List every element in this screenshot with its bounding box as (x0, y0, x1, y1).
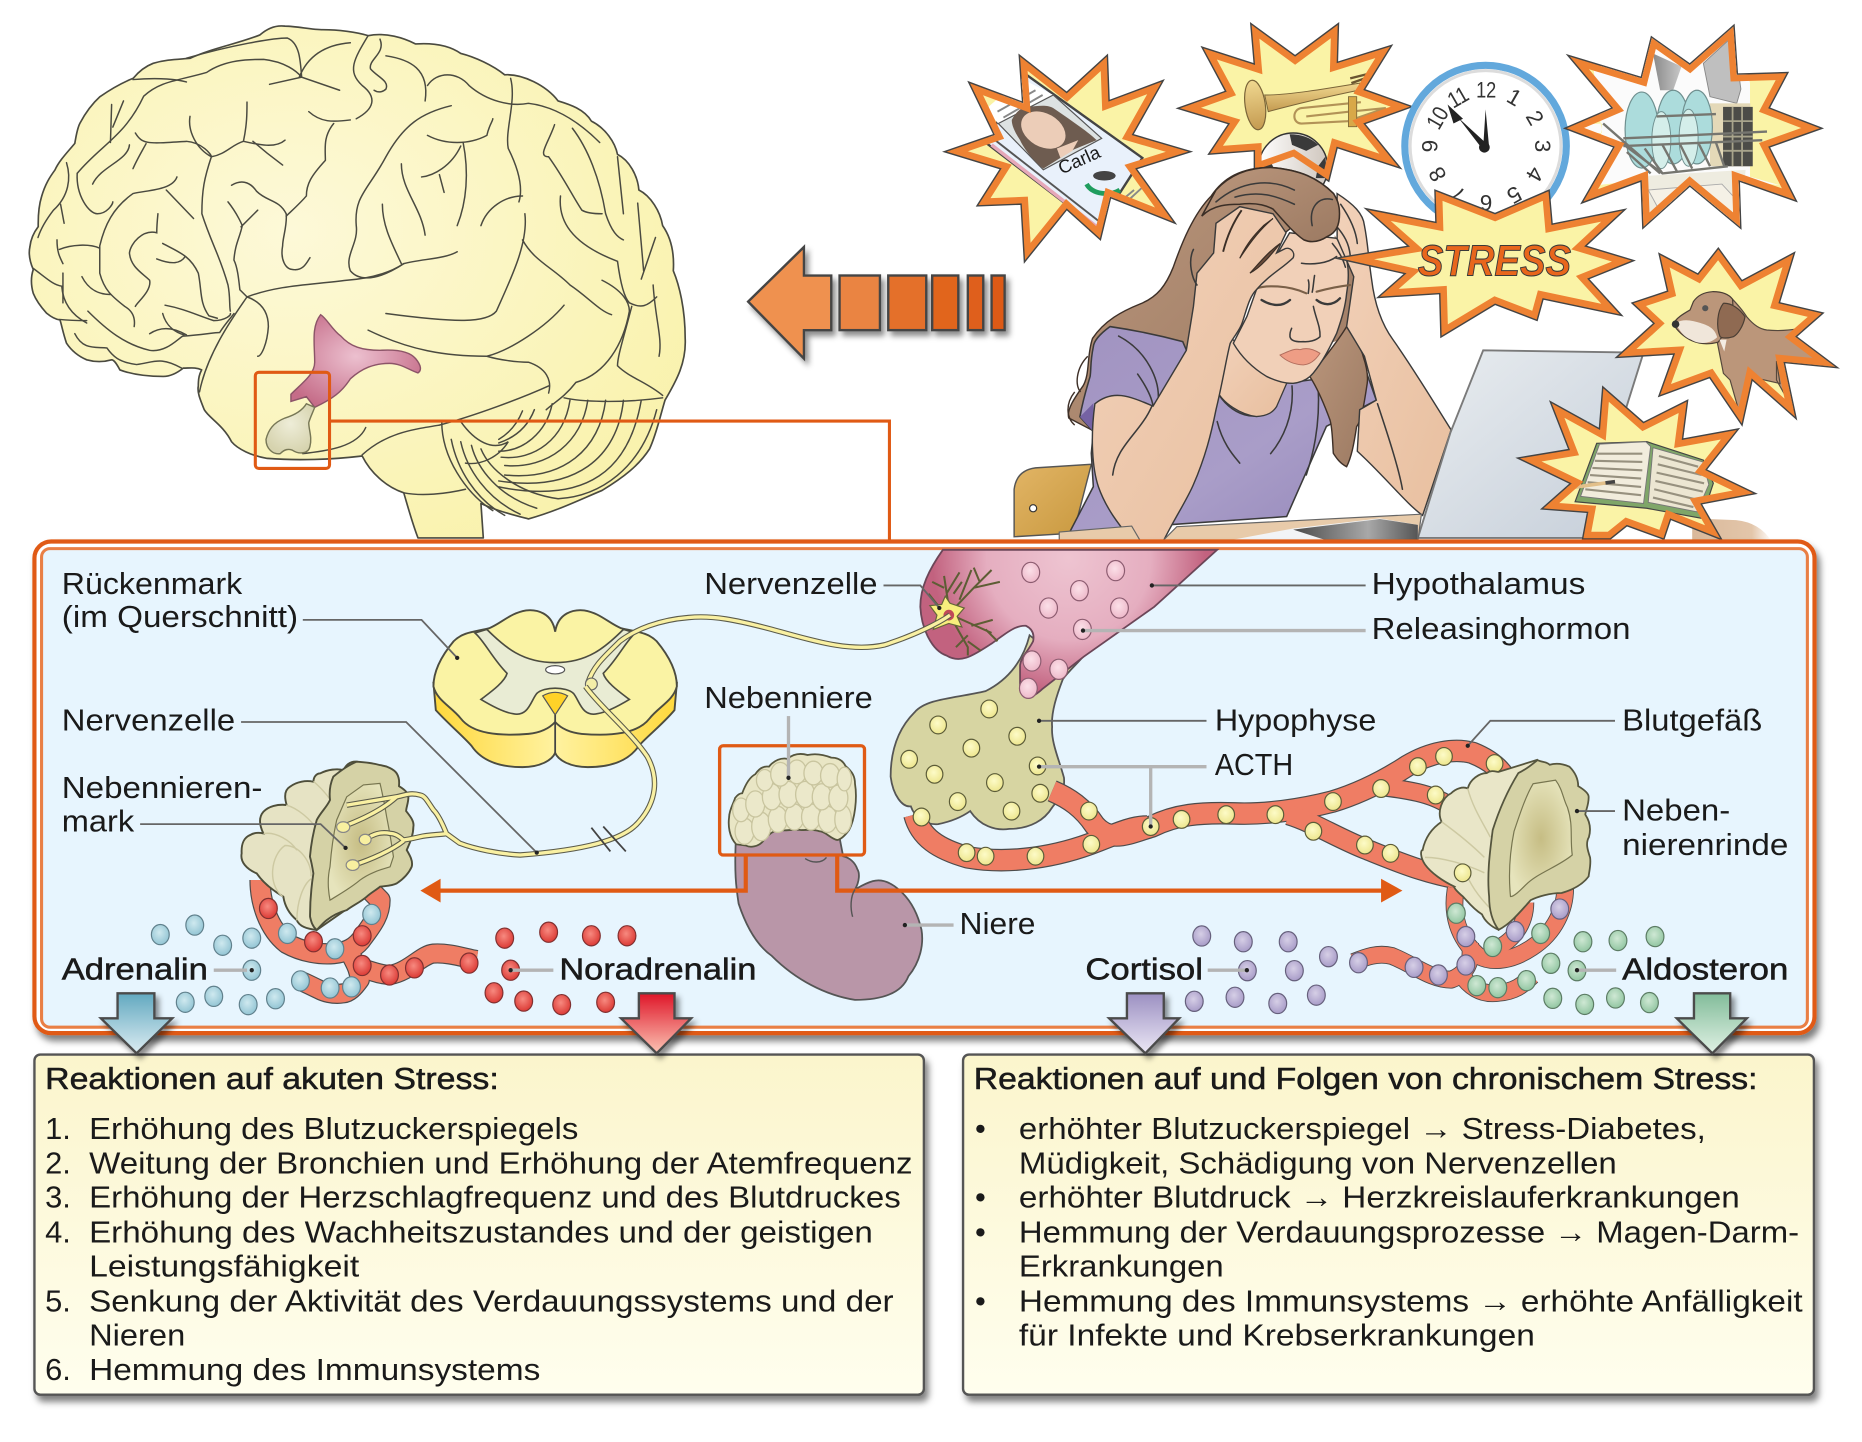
diagram labels: Blutgefäß (1622, 702, 1762, 737)
burst border (1618, 249, 1835, 423)
numbered list: Erhöhung des Blutzuckerspiegels (89, 1111, 578, 1146)
right vessels lower (1354, 888, 1565, 993)
bullet list: Müdigkeit, Schädigung von Nervenzellen (1019, 1145, 1617, 1180)
bullet list: erhöhter Blutdruck → Herzkreislauferkrankungen (1019, 1180, 1740, 1215)
diagram labels: Nebennieren- (62, 770, 262, 805)
spinal cord top (433, 610, 677, 735)
lobe bumps (1425, 789, 1490, 908)
bullet list: • (975, 1180, 986, 1215)
hair right strand (1310, 327, 1367, 467)
diagram labels: Neben- (1622, 793, 1730, 828)
burst: book (1520, 388, 1753, 538)
diagram labels: Nervenzelle (62, 702, 235, 737)
orange split arrow (420, 855, 1402, 903)
dog (1672, 292, 1841, 418)
bullet list: für Infekte und Krebserkrankungen (1019, 1317, 1535, 1352)
burst border (1567, 27, 1820, 227)
box: reactions to chronic stress (963, 1055, 1814, 1395)
burst: trumpet (1180, 25, 1410, 202)
burst: dog (1618, 249, 1841, 423)
shirt (1070, 327, 1376, 532)
spinal cord side (433, 683, 677, 767)
face features (1256, 257, 1350, 342)
spinal cord grey matter (475, 629, 635, 714)
burst border (1520, 388, 1753, 538)
clock numerals: 9 (1417, 140, 1442, 152)
girl at desk illustration (1014, 167, 1772, 542)
right vessels upper (914, 751, 1508, 881)
burst shape (947, 57, 1188, 260)
clock numerals: 5 (1503, 181, 1526, 209)
numbered list: 1. (45, 1111, 71, 1146)
diagram labels: Nervenzelle (704, 566, 878, 601)
lips (1280, 349, 1320, 365)
nerve from spinal cord to adrenal medulla (337, 686, 655, 870)
diagram labels: Nebenniere (704, 680, 873, 715)
arrow: noradrenaline to acute reactions (621, 993, 691, 1053)
burst border (947, 57, 1188, 260)
noradrenaline dots (259, 898, 636, 1015)
numbered list: 5. (45, 1284, 71, 1319)
diagram labels: Niere (960, 906, 1036, 941)
numbered list: 2. (45, 1145, 71, 1180)
kidney (735, 825, 922, 1000)
diagram labels: Aldosteron (1622, 952, 1788, 987)
numbered list: Nieren (89, 1317, 185, 1352)
diagram labels: Hypophyse (1215, 702, 1376, 737)
diagram labels: nierenrinde (1622, 827, 1788, 862)
neuron in hypothalamus (929, 568, 1000, 656)
back hair (1068, 167, 1334, 433)
pink releasing hormone dots (1019, 561, 1128, 698)
diagram labels: ACTH (1215, 747, 1293, 782)
phone icon (1087, 171, 1120, 194)
numbered list: Leistungsfähigkeit (89, 1249, 360, 1284)
chair (1014, 464, 1091, 537)
panel frame (34, 542, 1814, 1033)
bullet list: • (975, 1284, 986, 1319)
numbered list: Erhöhung des Wachheitszustandes und der geistigen (89, 1215, 873, 1250)
loose hair strands (1068, 356, 1088, 425)
brain illustration (29, 26, 685, 538)
clock numerals: 8 (1424, 162, 1452, 186)
adrenal gland on kidney (729, 754, 856, 847)
burst shape (1567, 27, 1820, 227)
bullet list: • (975, 1215, 986, 1250)
numbered list (45, 1111, 913, 1387)
dog snout (1676, 320, 1717, 343)
bullet list: Hemmung der Verdauungsprozesse → Magen-Darm- (1019, 1215, 1799, 1250)
bullet list: Erkrankungen (1019, 1249, 1224, 1284)
sleeve shade (1080, 403, 1093, 432)
arrow: aldosterone to chronic reactions (1677, 993, 1747, 1053)
burst shape (1340, 191, 1632, 336)
burst: STRESS (1340, 191, 1632, 336)
brain outline (29, 26, 685, 538)
numbered list: Erhöhung der Herzschlagfrequenz und des Blutdruckes (89, 1180, 901, 1215)
right hand finger lines (1332, 204, 1357, 267)
lobe bumps (264, 781, 335, 920)
left vessels (260, 880, 477, 994)
clock numerals: 6 (1480, 190, 1492, 215)
pituitary in brain (266, 404, 315, 454)
diagram labels: Rückenmark (62, 566, 243, 601)
heading: Reaktionen auf und Folgen von chronischem Stress: (974, 1061, 1758, 1096)
outer lobes (1421, 760, 1537, 930)
arrow: stress signal towards brain (748, 247, 1005, 359)
cut face (310, 762, 414, 930)
clock numerals: 7 (1446, 181, 1470, 209)
hypophysis (891, 635, 1083, 829)
paper on desk (1223, 518, 1418, 542)
desk edge (1163, 514, 1421, 540)
numbered list: Senkung der Aktivität des Verdauungssystems und der (89, 1284, 894, 1319)
main panel (34, 542, 1814, 1033)
numbered list: 6. (45, 1352, 71, 1387)
neck (1217, 338, 1287, 417)
bullet list: • (975, 1111, 986, 1146)
laptop (1418, 350, 1644, 538)
hair beside face (1328, 235, 1358, 344)
right arm fold (1378, 404, 1402, 489)
connector from brain to panel (255, 372, 889, 542)
dog ear (1718, 303, 1745, 338)
numbered list: 3. (45, 1180, 71, 1215)
diagram labels: Cortisol (1085, 952, 1203, 987)
diagram labels: Noradrenalin (559, 952, 756, 987)
contact card (986, 74, 1146, 228)
aldosterone dots (1447, 903, 1664, 1014)
bullet list (975, 1111, 1803, 1352)
right arm (1337, 194, 1451, 515)
clock numerals: 2 (1521, 106, 1549, 130)
burst shape (1180, 25, 1410, 180)
dishwasher interior (1579, 26, 1780, 228)
dog body (1716, 296, 1835, 409)
burst shape (1618, 249, 1835, 423)
face (1233, 233, 1348, 383)
bullet list: erhöhter Blutzuckerspiegel → Stress-Diabetes, (1019, 1111, 1706, 1146)
brain gyri (33, 36, 663, 495)
clock numerals: 12 (1476, 77, 1496, 102)
arrow: adrenaline to acute reactions (101, 993, 172, 1053)
clock numerals: 11 (1443, 82, 1473, 113)
right adrenal section (1421, 760, 1590, 930)
clock numerals: 1 (1503, 83, 1526, 111)
clock hands (1448, 105, 1490, 153)
numbered list: 4. (45, 1215, 71, 1250)
numbered list: Weitung der Bronchien und Erhöhung der Atemfrequenz (89, 1145, 913, 1180)
burst shape (1520, 388, 1753, 538)
burst: phone contact card (947, 57, 1188, 260)
clock numerals (1417, 77, 1555, 215)
hypothalamus section (920, 550, 1217, 698)
diagram labels: mark (62, 803, 135, 838)
box: reactions to acute stress (34, 1055, 924, 1395)
desk (1692, 518, 1772, 542)
leader lines (140, 583, 1616, 972)
dog head (1673, 292, 1734, 344)
shirt folds (1119, 336, 1319, 475)
cortex core (1510, 780, 1572, 897)
contact card: Carla (1055, 141, 1104, 178)
open book (1567, 442, 1713, 518)
nerve from hypothalamus to spinal cord (585, 615, 950, 690)
burst border (1180, 25, 1410, 180)
numbered list: Hemmung des Immunsystems (89, 1352, 540, 1387)
stress word: STRESS (1418, 237, 1571, 286)
diagram labels (62, 566, 1788, 987)
outer lobes (241, 762, 357, 930)
clock numerals: 4 (1521, 162, 1549, 186)
diagram labels: Releasinghormon (1372, 611, 1630, 646)
clock numerals: 10 (1421, 102, 1454, 133)
hypothalamus in brain (291, 315, 420, 407)
cut face (1488, 760, 1590, 930)
bullet list: Hemmung des Immunsystems → erhöhte Anfälligkeit (1019, 1284, 1803, 1319)
diagram labels: Hypothalamus (1372, 566, 1585, 601)
left adrenal section (241, 762, 414, 930)
orange box around adrenal (720, 746, 864, 855)
clock numerals: 3 (1530, 140, 1555, 152)
left arm and hand (1092, 207, 1294, 540)
heading: Reaktionen auf akuten Stress: (45, 1061, 499, 1096)
burst: dishwasher (1567, 26, 1820, 228)
trumpet (1242, 74, 1386, 131)
cortisol dots (1185, 899, 1569, 1014)
adrenaline dots (151, 904, 381, 1015)
soccer ball (1259, 133, 1328, 202)
burst border (1340, 191, 1632, 336)
diagram labels: (im Querschnitt) (62, 599, 298, 634)
left arm fold (1113, 406, 1152, 475)
diagram labels: Adrenalin (62, 952, 208, 987)
medulla (328, 783, 393, 900)
clock (1405, 65, 1566, 227)
ACTH dots (901, 700, 1503, 865)
cerebellum folds (442, 398, 663, 515)
arrow: cortisol to chronic reactions (1109, 993, 1179, 1053)
keyboard (1293, 519, 1418, 542)
hair top (1202, 167, 1340, 242)
hair strands and finger gaps (1191, 183, 1332, 285)
adrenal lobules (733, 760, 851, 844)
spinal cord cross-section (433, 610, 677, 767)
